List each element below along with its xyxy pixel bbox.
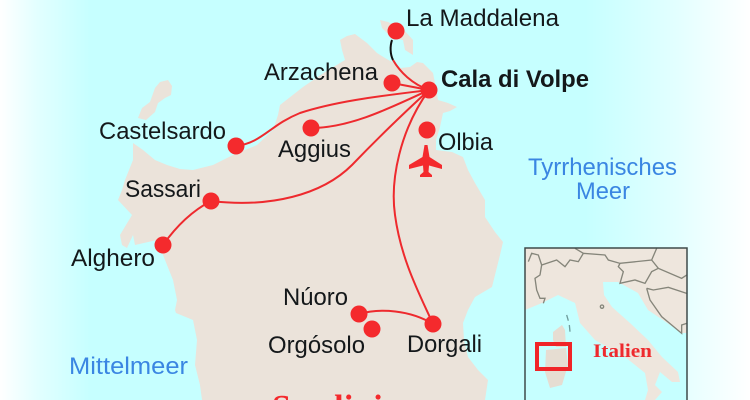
route: Alghero bbox=[163, 201, 211, 245]
label: Dorgali: Dorgali bbox=[407, 331, 482, 358]
label: Tyrrhenisches: Tyrrhenisches bbox=[528, 154, 677, 181]
label: Castelsardo: Castelsardo bbox=[99, 118, 226, 145]
label: La Maddalena: La Maddalena bbox=[406, 5, 560, 32]
route: Arzachena bbox=[392, 83, 429, 90]
inset: frame bbox=[525, 248, 687, 400]
route: Sassari bbox=[211, 90, 429, 203]
label: Sassari: Sassari bbox=[125, 176, 201, 203]
label: Cala di Volpe: Cala di Volpe bbox=[441, 66, 589, 93]
inset: borders bbox=[528, 248, 687, 333]
stop: La Maddalena bbox=[388, 22, 404, 40]
stop: Olbia bbox=[418, 122, 436, 138]
label: Nuoro: Núoro bbox=[283, 284, 348, 311]
label: Orgosolo: Orgósolo bbox=[268, 332, 365, 359]
inset: Corsica bbox=[553, 325, 566, 347]
stop: Orgosolo bbox=[364, 320, 380, 338]
route: Nuoro bbox=[359, 311, 433, 324]
route: Castelsardo bbox=[236, 90, 429, 146]
stop: Nuoro bbox=[350, 306, 368, 322]
stop: Sassari bbox=[202, 192, 220, 210]
label: Mittelmeer: Mittelmeer bbox=[69, 353, 188, 380]
inset: locator box bbox=[537, 344, 570, 369]
label: Alghero: Alghero bbox=[71, 245, 155, 272]
route: Dorgali bbox=[394, 90, 433, 324]
stop: Dorgali bbox=[424, 316, 442, 332]
labels bbox=[69, 5, 677, 380]
inset: land bbox=[525, 248, 687, 400]
route: ferry end bbox=[393, 60, 429, 90]
stop: Alghero bbox=[154, 236, 172, 254]
inset map: Italien bbox=[525, 248, 687, 400]
label: Arzachena: Arzachena bbox=[264, 59, 379, 86]
label: Meer: Meer bbox=[576, 178, 630, 205]
ferry route bbox=[391, 40, 393, 60]
route: Aggius bbox=[311, 90, 429, 128]
map: Sardinia land bbox=[118, 20, 503, 400]
stops bbox=[154, 22, 442, 338]
label: Aggius: Aggius bbox=[278, 136, 351, 163]
inset: Sardinia bbox=[545, 348, 568, 388]
icon: airplane bbox=[409, 145, 442, 177]
routes bbox=[163, 60, 433, 324]
label: Olbia: Olbia bbox=[438, 129, 494, 156]
stop: Castelsardo bbox=[228, 138, 244, 154]
inset: label Italien: Italien bbox=[593, 341, 652, 362]
stop: Cala di Volpe bbox=[420, 82, 438, 98]
stop: Arzachena bbox=[384, 74, 400, 92]
stop: Aggius bbox=[302, 120, 320, 136]
